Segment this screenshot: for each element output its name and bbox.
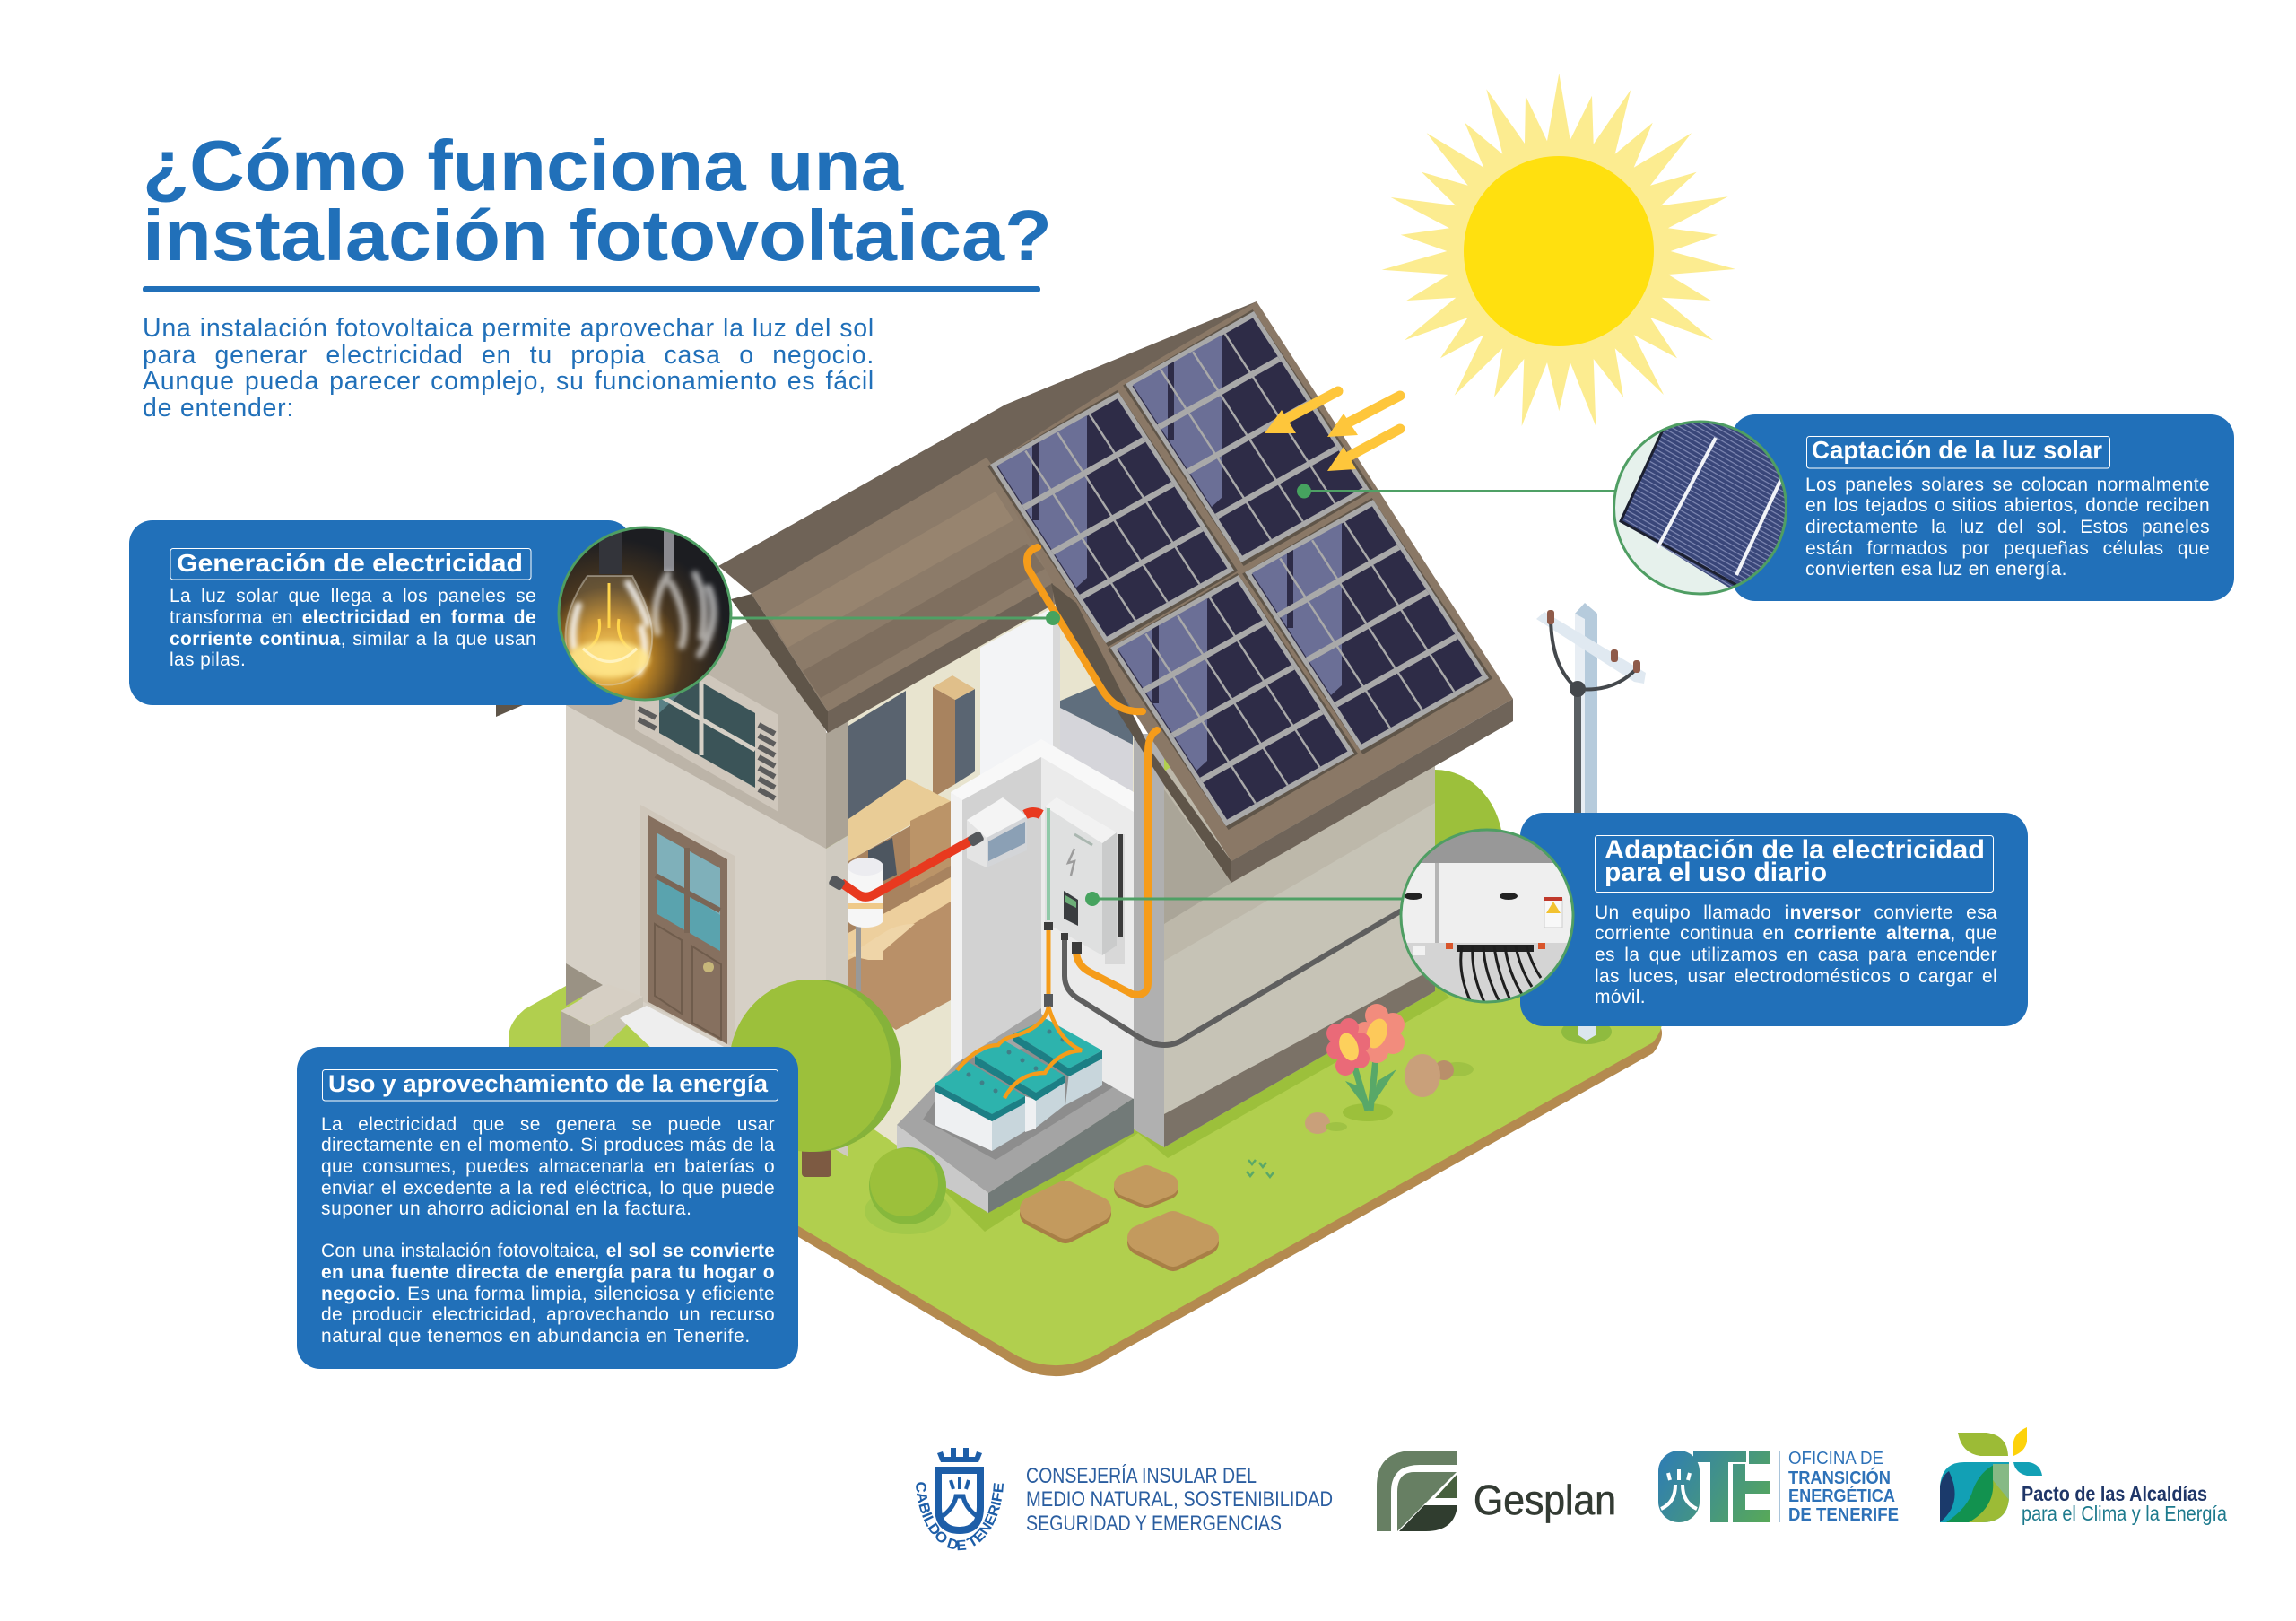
logo: Oficina de Transición Energética: ENERGÉTICA	[1788, 1486, 1895, 1506]
body text: en los tejados o sitios abiertos, donde reciben	[1805, 495, 2210, 516]
body text: corriente continua, similar a la que usan	[170, 629, 536, 649]
body text	[1805, 475, 2210, 580]
panel A	[987, 388, 1239, 649]
panel C	[1107, 571, 1359, 832]
logo: Oficina de Transición Energética: DE TENERIFE	[1788, 1505, 1899, 1525]
photo: solar cell	[1614, 413, 1794, 594]
roof solar slab	[990, 301, 1513, 883]
logo: Pacto de las Alcaldías: para el Clima y la Energía	[2022, 1502, 2227, 1525]
body text: natural que tenemos en abundancia en Tenerife.	[321, 1326, 751, 1346]
body text: las pilas.	[170, 649, 246, 670]
body text: directamente la luz del sol. Estos paneles	[1805, 517, 2210, 537]
body text	[321, 1114, 775, 1346]
panel: Adaptación de la electricidad	[1399, 813, 2028, 1026]
battery 1	[935, 1062, 1025, 1151]
panel D	[1241, 496, 1493, 756]
photo: inverter unit	[1399, 827, 1578, 1006]
sofa	[848, 877, 951, 1030]
stepping stones	[1032, 1176, 1206, 1259]
red grid cable and meter	[828, 813, 1041, 991]
photo: light bulbs	[559, 527, 731, 700]
panel: Generación de electricidad: Generación de electricidad	[177, 549, 523, 577]
panel: Generación de electricidad	[129, 520, 732, 705]
panel: Captación de la luz solar: Captación de la luz solar	[1812, 436, 2102, 464]
body text: móvil.	[1595, 987, 1646, 1007]
logo: Pacto de las Alcaldías: Pacto de las Alcaldías	[2022, 1482, 2207, 1505]
front steps	[561, 984, 726, 1068]
body text: negocio. Es una forma limpia, silenciosa y eficiente	[321, 1284, 775, 1304]
side wall	[1134, 592, 1435, 1147]
cabinets	[1058, 684, 1133, 807]
interior room cutaway	[848, 583, 1139, 1202]
ground platform	[509, 700, 1662, 1376]
panel: Captación de la luz solar	[1613, 414, 2234, 601]
body text: es la que utilizamos en casa para encender	[1595, 945, 1997, 965]
window	[635, 632, 778, 812]
body text: suponer un ahorro adicional en la factura.	[321, 1198, 692, 1219]
back tree	[1367, 770, 1503, 926]
leader lines	[718, 484, 1623, 906]
roof corner tab	[496, 705, 523, 717]
sunlight arrows	[1265, 391, 1400, 471]
panel: Uso y aprovechamiento de la energía: Uso y aprovechamiento de la energía	[328, 1070, 769, 1097]
body text	[1595, 902, 1997, 1007]
panel: Adaptación de la electricidad: para el uso diario	[1605, 858, 1827, 887]
logo: Gesplan: Gesplan	[1474, 1477, 1616, 1523]
logo: Pacto de las Alcaldías	[1940, 1427, 2227, 1525]
desk	[848, 779, 951, 933]
title	[143, 126, 1052, 275]
panel B	[1122, 308, 1374, 568]
orange and grey cabling	[1027, 547, 1400, 1045]
body text: Un equipo llamado inversor convierte esa	[1595, 902, 1997, 923]
logo: Cabildo de Tenerife: CABILDO DE TENERIFE	[916, 1482, 1004, 1550]
utility pole	[1536, 603, 1646, 1044]
body text: están formados por pequeñas células que	[1805, 538, 2210, 559]
panel: Adaptación de la electricidad: Adaptación de la electricidad	[1605, 835, 1985, 865]
logo text: Consejería: SEGURIDAD Y EMERGENCIAS	[1026, 1512, 1282, 1536]
body text: convierten esa luz en energía.	[1805, 559, 2067, 580]
logo text: Consejería	[1026, 1464, 1333, 1536]
flowers	[1326, 1004, 1405, 1121]
logo: Oficina de Transición Energética: TRANSICIÓN	[1788, 1467, 1891, 1488]
title: ¿Cómo funciona una	[143, 126, 904, 205]
breaker box	[967, 797, 1027, 867]
body text: transforma en electricidad en forma de	[170, 607, 536, 628]
body text: Con una instalación fotovoltaica, el sol se convierte	[321, 1241, 775, 1261]
logo: Cabildo de Tenerife	[916, 1448, 1004, 1550]
logo text: Consejería: CONSEJERÍA INSULAR DEL	[1026, 1464, 1257, 1488]
intro text block	[143, 316, 874, 422]
solar panels	[987, 308, 1493, 832]
door	[640, 805, 735, 1048]
icon: sun	[1382, 74, 1735, 426]
body text: directamente en el momento. Si produces más de la	[321, 1135, 775, 1155]
roof left slope	[718, 301, 1257, 733]
title: instalación fotovoltaica?	[143, 196, 1052, 275]
logo: Oficina de Transición Energética: OFICINA DE	[1788, 1449, 1883, 1468]
gable front wall	[566, 620, 848, 1157]
bush	[865, 1147, 951, 1234]
body text: La luz solar que llega a los paneles se	[170, 586, 536, 606]
title underline	[143, 286, 1040, 292]
rocks	[1305, 1054, 1474, 1134]
body text: las luces, usar electrodomésticos o cargar el	[1595, 966, 1997, 987]
body text: en una fuente directa de energía para tu hogar o	[321, 1262, 775, 1283]
concrete base slab	[897, 1008, 1134, 1213]
body text: corriente continua en corriente alterna, que	[1595, 923, 1997, 944]
body text: de producir electricidad, aprovechando un recurso	[321, 1304, 775, 1325]
battery 3	[1013, 1019, 1102, 1105]
body text	[170, 586, 536, 670]
grass tufts	[1247, 1160, 1274, 1177]
logo: Oficina de Transición Energética	[1658, 1449, 1899, 1525]
front tree	[729, 980, 901, 1177]
battery bank	[935, 1007, 1102, 1151]
wardrobe	[933, 675, 975, 797]
body text: enviar el excedente a la red eléctrica, lo que puede	[321, 1178, 775, 1198]
battery 2	[975, 1040, 1065, 1132]
panel: Uso y aprovechamiento de la energía	[297, 1047, 798, 1369]
logo: Gesplan	[1377, 1451, 1616, 1531]
body text: Los paneles solares se colocan normalmente	[1805, 475, 2210, 495]
technical wall	[923, 739, 1134, 1160]
inverter	[1045, 797, 1125, 964]
logo text: Consejería: MEDIO NATURAL, SOSTENIBILIDAD	[1026, 1487, 1333, 1512]
body text: La electricidad que se genera se puede usar	[321, 1114, 775, 1135]
body text: que consumes, puedes almacenarla en baterías o	[321, 1156, 775, 1177]
